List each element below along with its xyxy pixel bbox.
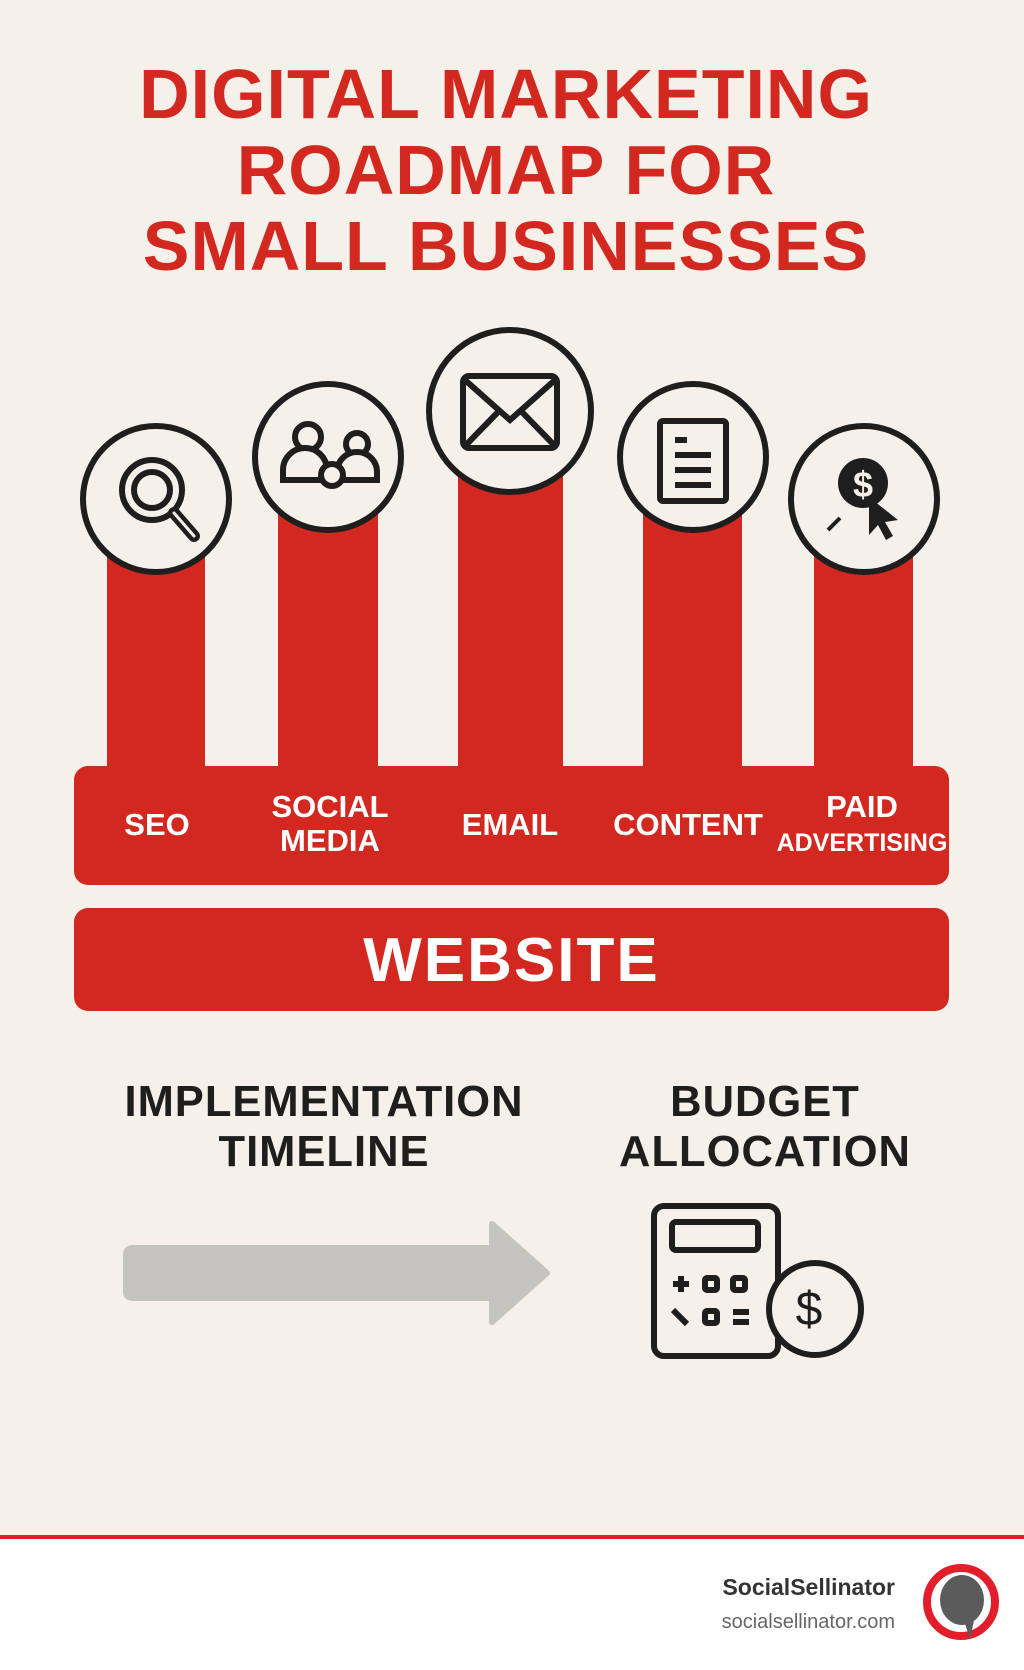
title: SMALL BUSINESSES xyxy=(143,207,869,285)
icon: calculator and coin xyxy=(651,1203,864,1359)
label: SEO: SEO xyxy=(124,807,190,842)
arrow: timeline xyxy=(123,1221,550,1325)
icon: email envelope xyxy=(429,330,591,492)
channel band xyxy=(74,766,949,885)
footer brand text: SocialSellinator xyxy=(722,1574,895,1600)
title xyxy=(139,55,873,285)
label: paid advertising xyxy=(777,789,947,857)
website band xyxy=(74,908,949,1011)
heading: budget allocation: BUDGET xyxy=(670,1078,860,1126)
heading: implementation timeline: IMPLEMENTATION xyxy=(124,1078,524,1126)
pillar bars xyxy=(107,440,913,780)
heading: implementation timeline xyxy=(124,1078,524,1176)
heading: implementation timeline: TIMELINE xyxy=(218,1128,430,1176)
icon: social people xyxy=(255,384,401,530)
logo xyxy=(923,1564,999,1640)
label: email: EMAIL xyxy=(462,807,558,842)
title: ROADMAP FOR xyxy=(237,131,775,209)
roadmap diagram xyxy=(74,327,949,1011)
label: paid advertising: ADVERTISING xyxy=(777,829,947,857)
icon: calculator and coin: $ xyxy=(796,1283,822,1336)
label: content: CONTENT xyxy=(613,807,763,842)
label: paid advertising: PAID xyxy=(826,789,898,824)
label: website: WEBSITE xyxy=(363,926,660,995)
title: DIGITAL MARKETING xyxy=(139,55,873,133)
heading: budget allocation xyxy=(619,1078,911,1176)
footer brand text xyxy=(722,1574,895,1633)
footer xyxy=(0,1535,1024,1670)
icon: SEO magnifier xyxy=(83,426,229,572)
icon: paid advertising: $ xyxy=(853,464,873,505)
icon: content document xyxy=(620,384,766,530)
label: social media: MEDIA xyxy=(280,823,380,858)
icon: paid advertising xyxy=(791,426,937,572)
label: social media xyxy=(271,789,389,858)
label: social media: SOCIAL xyxy=(271,789,389,824)
footer brand text: socialsellinator.com xyxy=(722,1611,895,1633)
heading: budget allocation: ALLOCATION xyxy=(619,1128,911,1176)
